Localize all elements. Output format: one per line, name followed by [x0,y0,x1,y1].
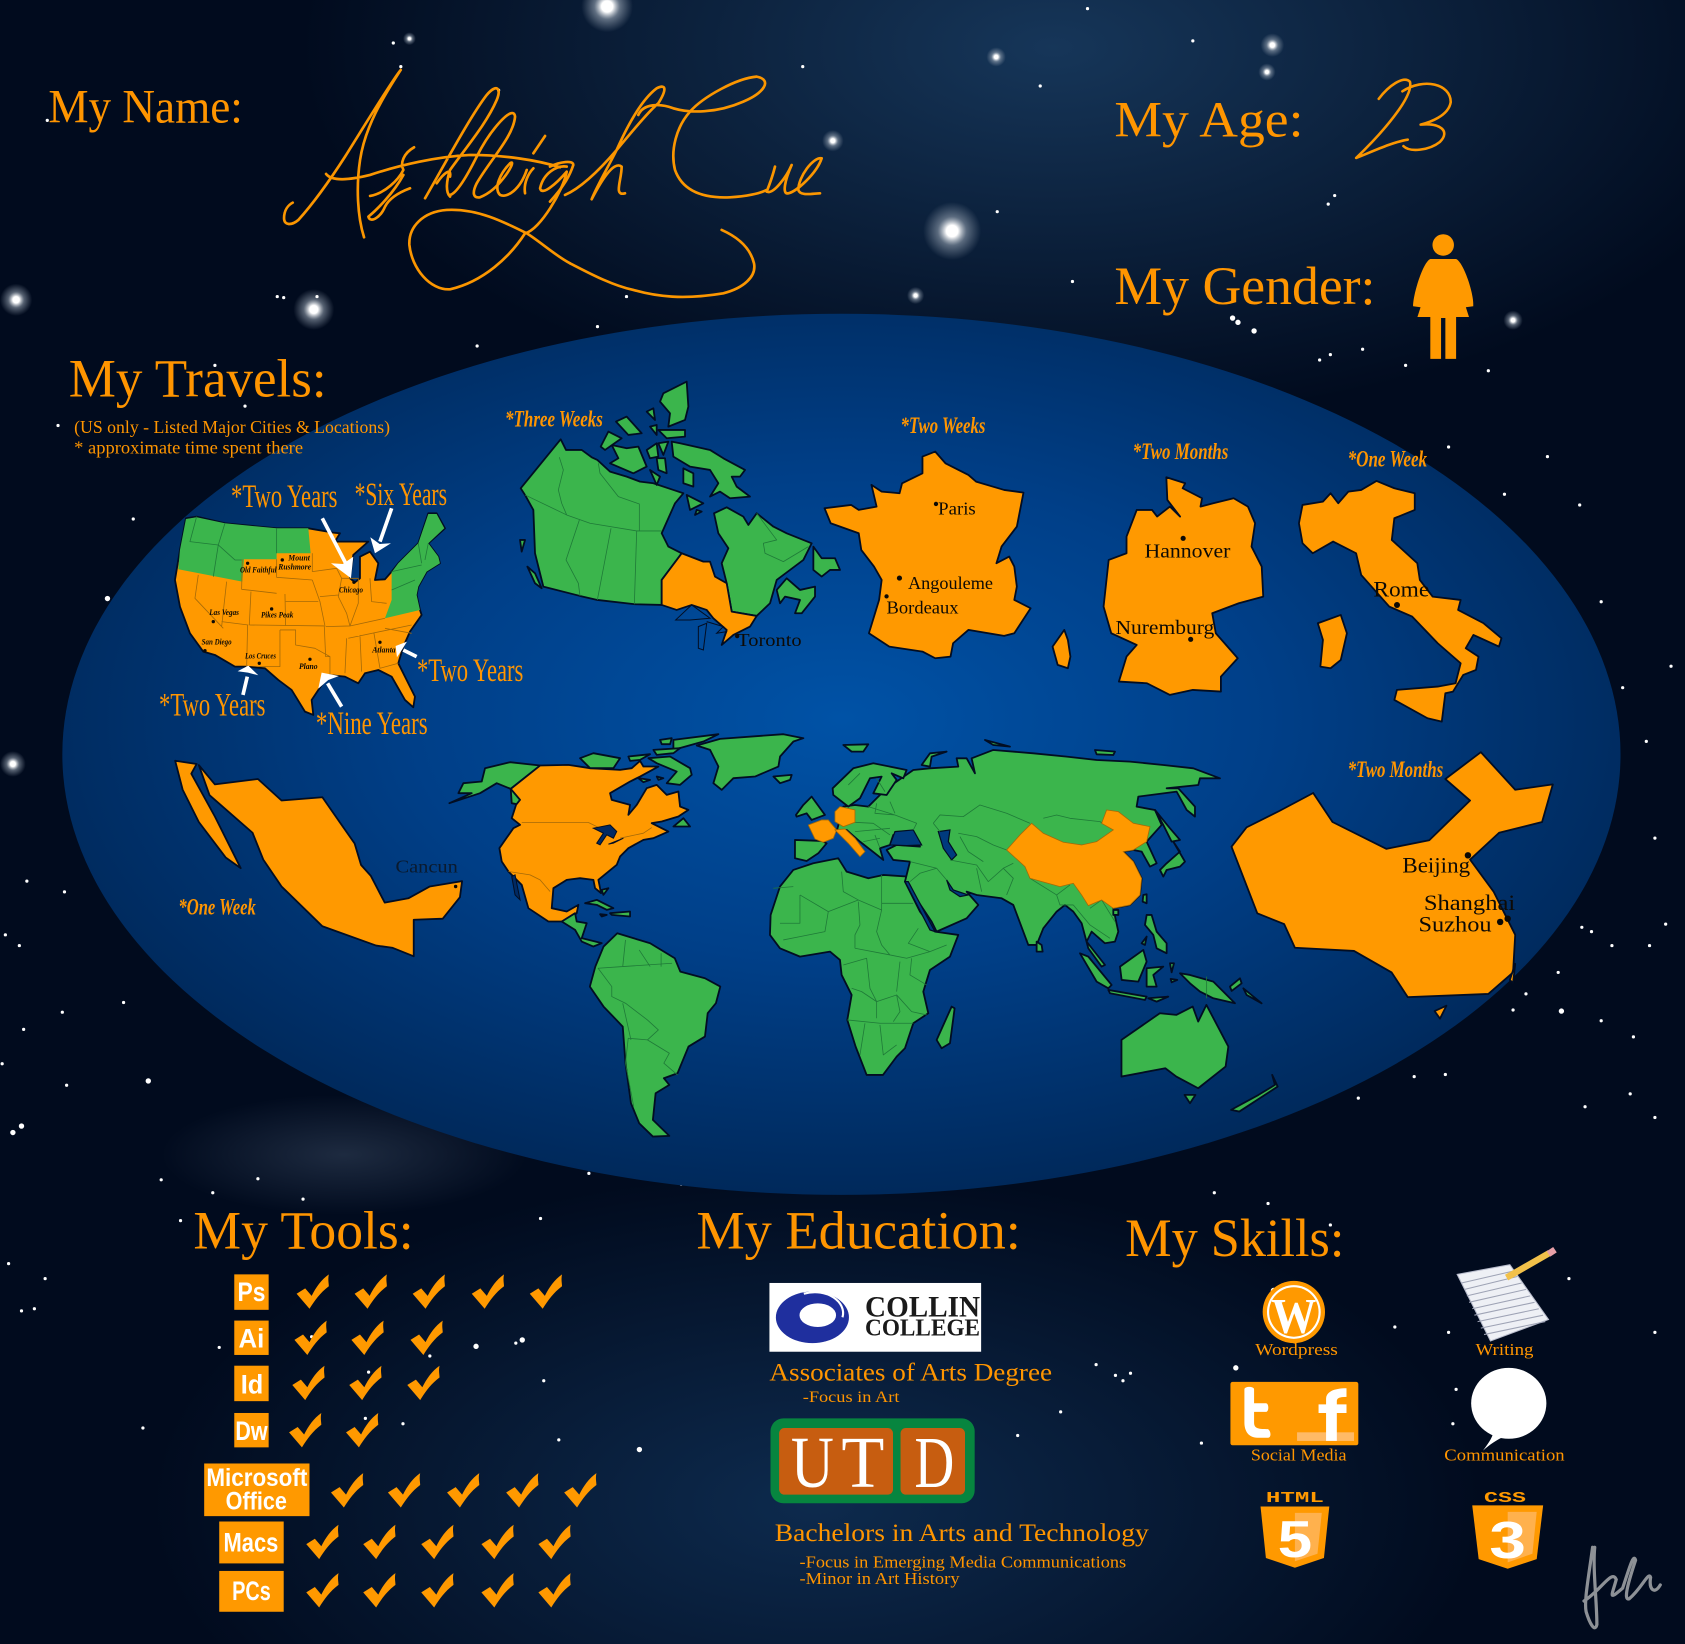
skill: writing: Writing [1475,1340,1534,1359]
map: canada [520,382,840,650]
icon: female figure [1413,234,1473,359]
skill: css3: 3 [1489,1511,1526,1569]
small grey signature [1584,1547,1660,1628]
world map [449,734,1278,1137]
us duration labels: *Two Years [417,652,523,688]
us duration labels: *Six Years [355,476,447,512]
heading: my tools: My Tools: [193,1201,414,1261]
map: france [825,452,1070,668]
us duration labels: *Two Years [159,687,265,723]
heading: my name: My Name: [48,81,243,133]
heading: my travels: My Travels: [69,348,327,408]
australia and new zealand [1121,1005,1278,1112]
france labels [884,413,993,618]
logo: utd: D [914,1422,954,1503]
us city labels [202,553,396,671]
logo: collin college: COLLEGE [865,1315,980,1342]
skill: html5: 5 [1278,1510,1312,1568]
skill: communication [1444,1368,1565,1464]
china labels: Beijing [1402,853,1470,878]
signature: Ashleigh Cue [284,70,822,297]
logo: utd: U [791,1422,834,1503]
map: germany [1104,477,1263,695]
eurasia [795,740,1220,967]
travels note [74,417,390,457]
germany labels: Hannover [1144,541,1231,563]
skill: wordpress: W [1271,1288,1316,1343]
tool: microsoft office: Office [226,1489,287,1516]
map: italy [1299,481,1501,722]
skill: wordpress [1255,1281,1338,1359]
us duration labels: *Nine Years [316,705,428,741]
tool: indesign: Id [241,1370,263,1400]
us city labels: Los Cruces [244,651,276,660]
travels note: (US only - Listed Major Cities & Locations) [74,417,390,438]
map: china [1232,752,1553,1019]
skill: social media [1230,1382,1358,1464]
germany labels [1115,439,1231,642]
us city labels: Chicago [339,585,363,594]
us city labels: Old Faithful [240,566,277,575]
tools list [204,1274,596,1612]
skill: wordpress: Wordpress [1255,1340,1338,1359]
south america [590,933,720,1137]
china labels [1348,757,1515,937]
france labels: Angouleme [908,573,993,593]
map: united states [175,508,445,715]
africa [770,858,958,1075]
us city labels: Las Vegas [208,608,239,617]
germany labels: Nuremburg [1115,617,1214,639]
north america [449,734,803,947]
tool: pcs [219,1571,284,1612]
italy labels [1348,446,1429,608]
tool: microsoft office [204,1463,309,1516]
associates degree text: -Focus in Art [803,1389,900,1406]
skill: css3 [1472,1489,1543,1569]
logo: collin college [769,1283,981,1352]
us city labels: San Diego [202,637,232,646]
arrows: us durations [238,508,417,707]
map: mexico [175,761,462,956]
us duration labels [159,476,523,741]
china labels: *Two Months [1348,757,1443,783]
skill: communication: Communication [1444,1445,1565,1464]
mexico labels [178,857,458,920]
france labels: *Two Weeks [901,413,985,439]
us city labels: Rushmore [277,562,311,571]
canada label: *Three Weeks [505,407,603,433]
heading: my age: My Age: [1114,91,1304,147]
china labels: Shanghai [1424,890,1515,915]
tool: macs [219,1522,284,1563]
mexico labels: Cancun [395,857,458,877]
tool: microsoft office: Microsoft [206,1465,307,1492]
skill: html5 [1261,1489,1329,1568]
skill: html5: HTML [1266,1489,1324,1507]
mexico labels: *One Week [178,894,256,920]
skill: css3: CSS [1484,1489,1526,1507]
heading: my education: My Education: [696,1201,1021,1261]
logo: utd: T [841,1422,884,1503]
tool: indesign [234,1366,269,1401]
canada label [505,407,802,650]
tool: illustrator: Ai [239,1323,264,1353]
associates degree text [769,1358,1052,1406]
heading: my skills: My Skills: [1125,1208,1344,1268]
us city labels: Pikes Peak [261,610,293,619]
france labels: Paris [938,499,976,519]
china labels: Suzhou [1418,912,1492,937]
skill: writing [1457,1250,1555,1359]
bachelors degree text: -Minor in Art History [800,1569,960,1588]
tool: photoshop: Ps [237,1277,265,1307]
us city labels: Mount [287,553,311,562]
logo: collin college: COLLIN [865,1289,980,1323]
tool: pcs: PCs [232,1576,271,1606]
us city labels: Atlanta [371,646,396,655]
italy labels: *One Week [1348,446,1427,472]
associates degree text: Associates of Arts Degree [769,1358,1052,1387]
bachelors degree text: -Focus in Emerging Media Communications [800,1553,1127,1572]
handwritten age 23 [1356,80,1451,158]
france labels: Bordeaux [887,598,959,618]
canada label: Toronto [737,630,802,650]
logo: utd [771,1418,975,1503]
tool: macs: Macs [224,1528,278,1558]
tool: dreamweaver: Dw [235,1416,268,1446]
skill: social media: Social Media [1251,1445,1347,1464]
us city markers [203,558,382,665]
tool: illustrator [234,1321,269,1355]
asia islands [1080,915,1262,1003]
globe ellipse [62,314,1621,1195]
bachelors degree text [775,1518,1149,1588]
check marks [289,1274,596,1607]
travels note: * approximate time spent there [74,437,303,457]
germany labels: *Two Months [1133,439,1228,465]
us duration labels: *Two Years [231,478,337,514]
bachelors degree text: Bachelors in Arts and Technology [775,1518,1149,1547]
italy labels: Rome [1373,576,1429,601]
heading: my gender: My Gender: [1114,256,1376,316]
us city labels: Plano [299,662,318,671]
